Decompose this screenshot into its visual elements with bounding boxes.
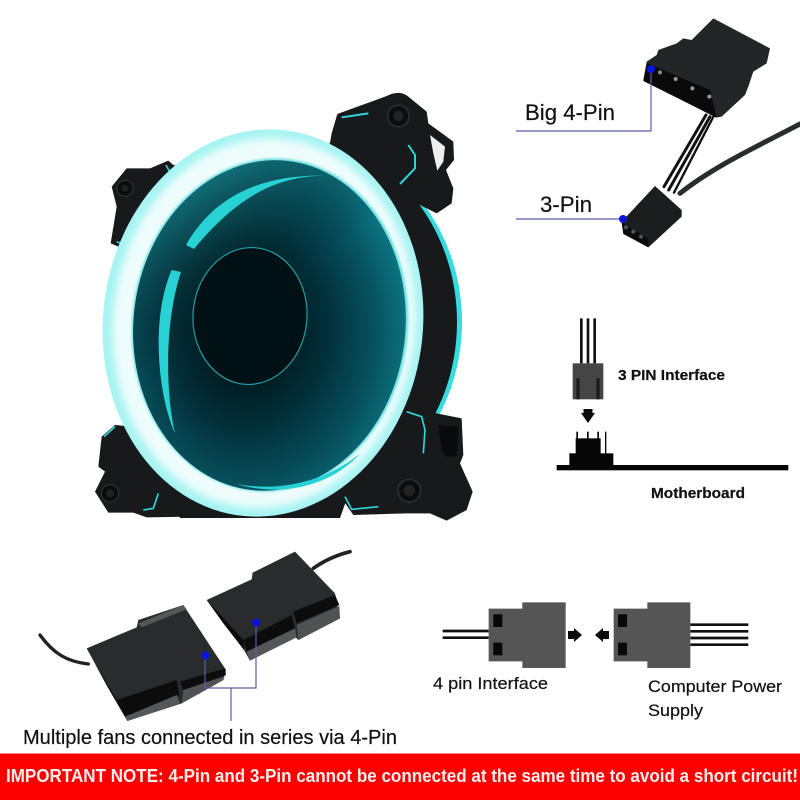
- arrow right: [568, 628, 582, 642]
- label: Computer Power Supply: Supply: [648, 701, 704, 720]
- corner: bottom left: [95, 425, 190, 517]
- label: 4 pin Interface: 4 pin Interface: [433, 674, 548, 693]
- arrow left: [595, 628, 609, 642]
- warning banner: [0, 754, 800, 800]
- left 4 pin connector: [443, 602, 566, 668]
- label: 3 PIN Interface: 3 PIN Interface: [618, 368, 725, 384]
- fan hub: [188, 244, 312, 388]
- 3-pin connector: [622, 186, 682, 247]
- glow ring: [84, 113, 442, 533]
- 3 pin plug: [573, 318, 603, 399]
- big 4-pin and 3-pin cable photo: [622, 18, 800, 247]
- series connection photo: [40, 552, 350, 721]
- fan bowl: [115, 144, 425, 506]
- callout: 3-Pin: [516, 192, 627, 223]
- arrow down: [581, 409, 595, 423]
- callout: series via 4-pin: Multiple fans connected in series via 4-Pin: [23, 726, 397, 749]
- left molex connector: [87, 605, 226, 721]
- corner: bottom right: [338, 405, 473, 521]
- callout: 3-Pin: 3-Pin: [540, 192, 592, 217]
- diagram: 4 pin to power supply: [433, 602, 782, 720]
- callout: Big 4-Pin: [516, 65, 655, 131]
- right molex connector: [207, 552, 340, 661]
- label: Computer Power Supply: Computer Power: [648, 677, 782, 696]
- mounting corners: [95, 93, 473, 521]
- label: Motherboard: Motherboard: [651, 485, 745, 502]
- corner: top left: [111, 161, 197, 249]
- right power connector: [614, 602, 748, 668]
- fan rear housing: [137, 140, 462, 518]
- fan: [84, 93, 473, 533]
- fan cables: [40, 552, 350, 664]
- cables: [664, 115, 800, 193]
- corner: top right: [323, 93, 454, 213]
- callout: series via 4-pin: [23, 618, 397, 749]
- big 4-pin connector: [643, 18, 770, 118]
- motherboard socket: [557, 432, 788, 470]
- label: Computer Power Supply: [648, 677, 782, 720]
- callout: Big 4-Pin: Big 4-Pin: [525, 100, 615, 125]
- inner light arcs: [159, 176, 360, 490]
- diagram: 3 pin to motherboard: [557, 318, 788, 502]
